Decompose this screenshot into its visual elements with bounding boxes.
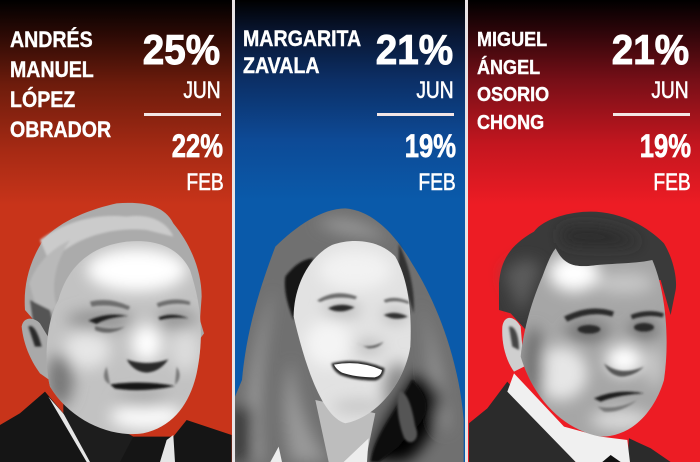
February label: FEB	[654, 169, 691, 196]
June label: JUN	[417, 77, 454, 104]
panel: Miguel Ángel Osorio Chong	[468, 0, 700, 462]
candidate name: MIGUEL	[477, 28, 547, 51]
June percentage: 25%	[143, 26, 220, 73]
February percentage: 22%	[172, 128, 223, 164]
panel: Andrés Manuel López Obrador	[0, 0, 232, 462]
February percentage: 19%	[405, 128, 456, 164]
candidate name: OSORIO	[477, 83, 549, 106]
candidate name: CHONG	[477, 110, 544, 134]
candidate name: ANDRÉS	[10, 27, 93, 52]
candidate name: LÓPEZ	[10, 87, 75, 112]
candidate name: ZAVALA	[243, 53, 319, 78]
June label: JUN	[652, 77, 689, 104]
candidate name: ÁNGEL	[477, 56, 540, 78]
June percentage: 21%	[376, 26, 453, 73]
candidate name: MANUEL	[10, 57, 94, 82]
portrait: López Obrador	[0, 202, 232, 462]
candidate name	[477, 28, 549, 134]
June label: JUN	[184, 77, 221, 104]
candidate name: OBRADOR	[10, 117, 111, 142]
candidate name: MARGARITA	[243, 26, 361, 51]
February percentage: 19%	[640, 128, 691, 164]
February label: FEB	[419, 169, 456, 196]
candidate name	[243, 26, 361, 78]
candidate name	[10, 27, 111, 142]
portrait: Osorio Chong	[469, 212, 676, 462]
portrait: Zavala	[235, 208, 464, 462]
February label: FEB	[187, 169, 224, 196]
June percentage: 21%	[612, 26, 689, 73]
panel: Margarita Zavala	[235, 0, 465, 462]
